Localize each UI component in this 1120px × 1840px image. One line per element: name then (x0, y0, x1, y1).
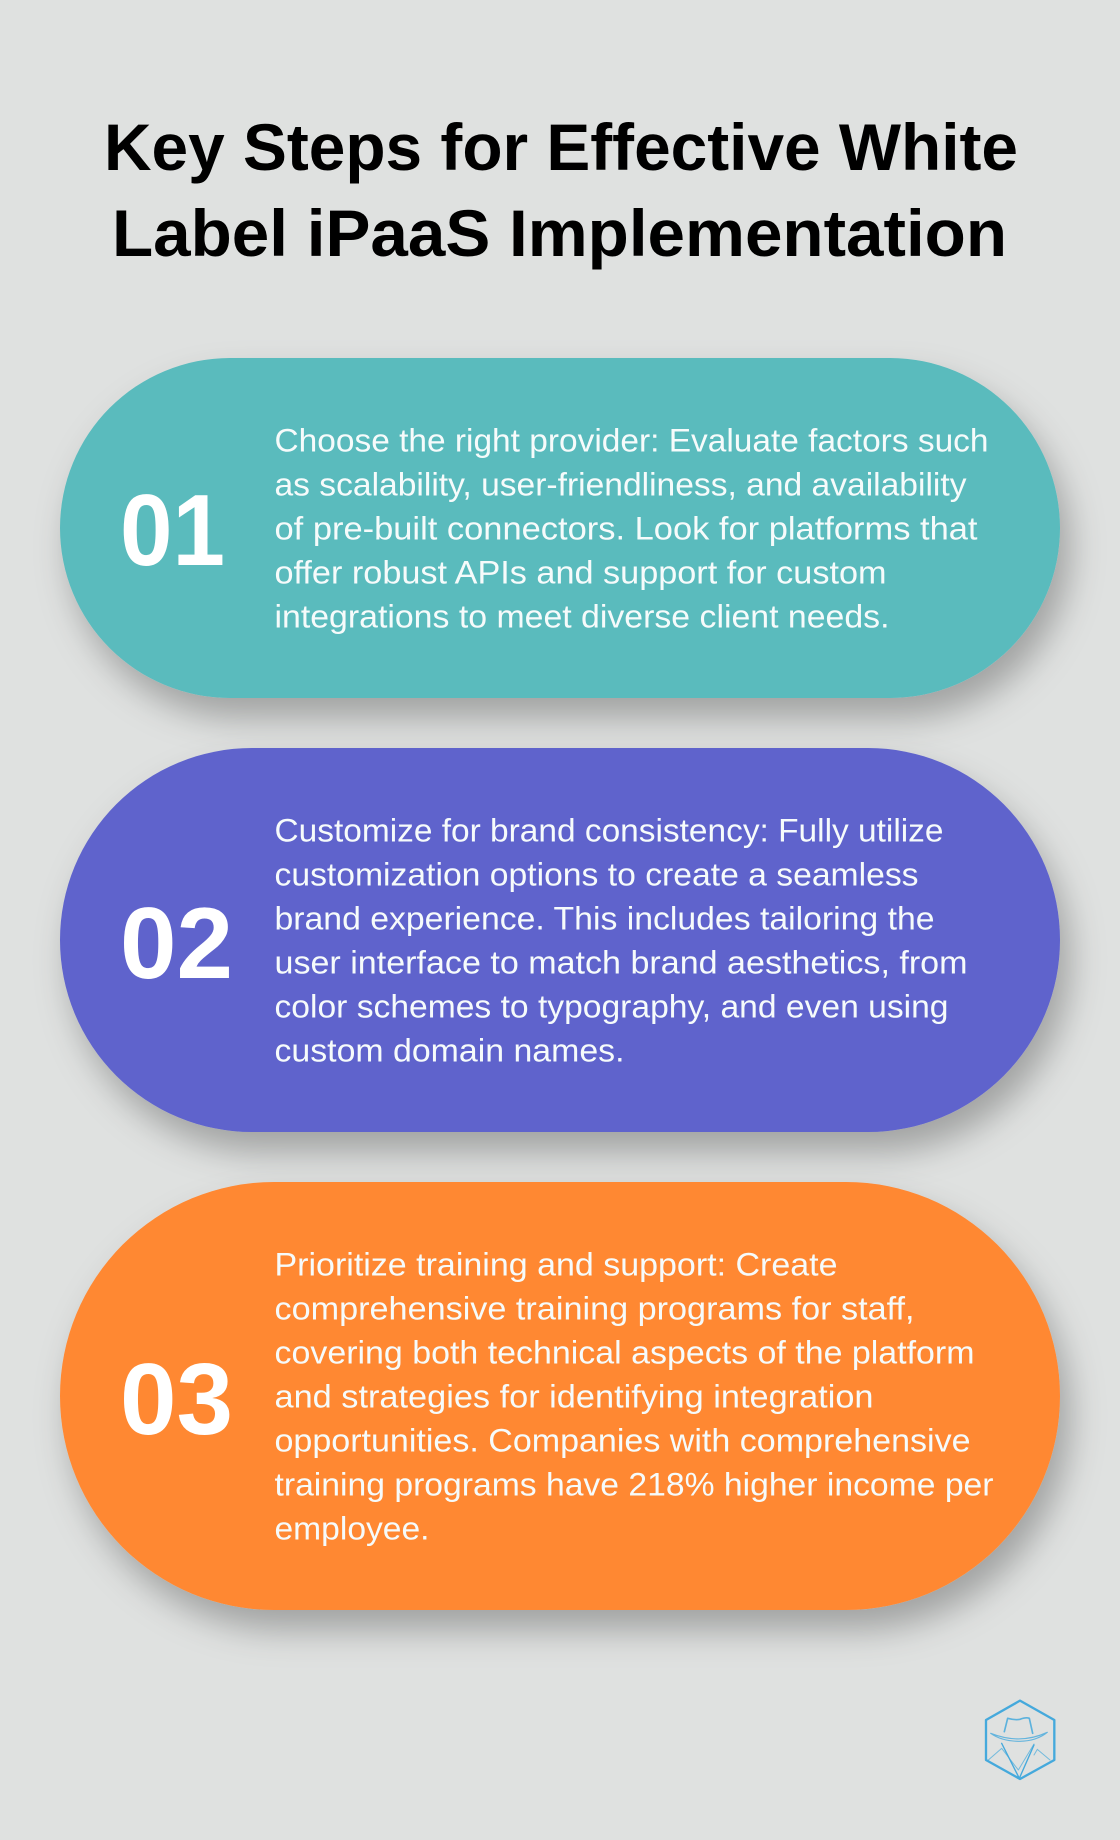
step 02 text: custom domain names. (274, 1032, 624, 1068)
step 03 text: covering both technical aspects of the platform (274, 1334, 974, 1370)
step 01 text: as scalability, user-friendliness, and availability (274, 466, 966, 502)
step 01 text: of pre-built connectors. Look for platforms that (274, 510, 978, 546)
step number 01: 01 (120, 475, 225, 587)
step number 03: 03 (120, 1344, 233, 1456)
step 02 text: user interface to match brand aesthetics, from (274, 944, 968, 980)
step 03 text: opportunities. Companies with comprehensive (274, 1422, 970, 1458)
step 02 text: Customize for brand consistency: Fully utilize (274, 812, 944, 848)
title (104, 110, 1018, 270)
step 02 text: color schemes to typography, and even using (274, 988, 948, 1024)
pill background orange (60, 1182, 1060, 1610)
step number 02: 02 (120, 888, 233, 1000)
icon: hexagon spy logo (986, 1701, 1054, 1779)
step 02 text: brand experience. This includes tailoring the (274, 900, 934, 936)
step 03 text: Prioritize training and support: Create (274, 1246, 838, 1282)
title: Key Steps for Effective White (104, 110, 1018, 184)
step 03 text: comprehensive training programs for staff, (274, 1290, 914, 1326)
step 01 text: integrations to meet diverse client needs. (274, 598, 890, 634)
step 01 text (274, 422, 988, 634)
step 03 text: training programs have 218% higher income per (274, 1466, 994, 1502)
pill background teal (60, 358, 1060, 698)
step 03 text: employee. (274, 1510, 430, 1546)
panel: step 03 (60, 1182, 1060, 1610)
panel: step 02 (60, 748, 1060, 1132)
step 03 text (274, 1246, 994, 1546)
panel: step 01 (60, 358, 1060, 698)
step 01 text: offer robust APIs and support for custom (274, 554, 886, 590)
step 01 text: Choose the right provider: Evaluate factors such (274, 422, 988, 458)
step 03 text: and strategies for identifying integration (274, 1378, 874, 1414)
title: Label iPaaS Implementation (112, 196, 1007, 270)
pill background indigo (60, 748, 1060, 1132)
step 02 text (274, 812, 968, 1068)
step 02 text: customization options to create a seamless (274, 856, 918, 892)
